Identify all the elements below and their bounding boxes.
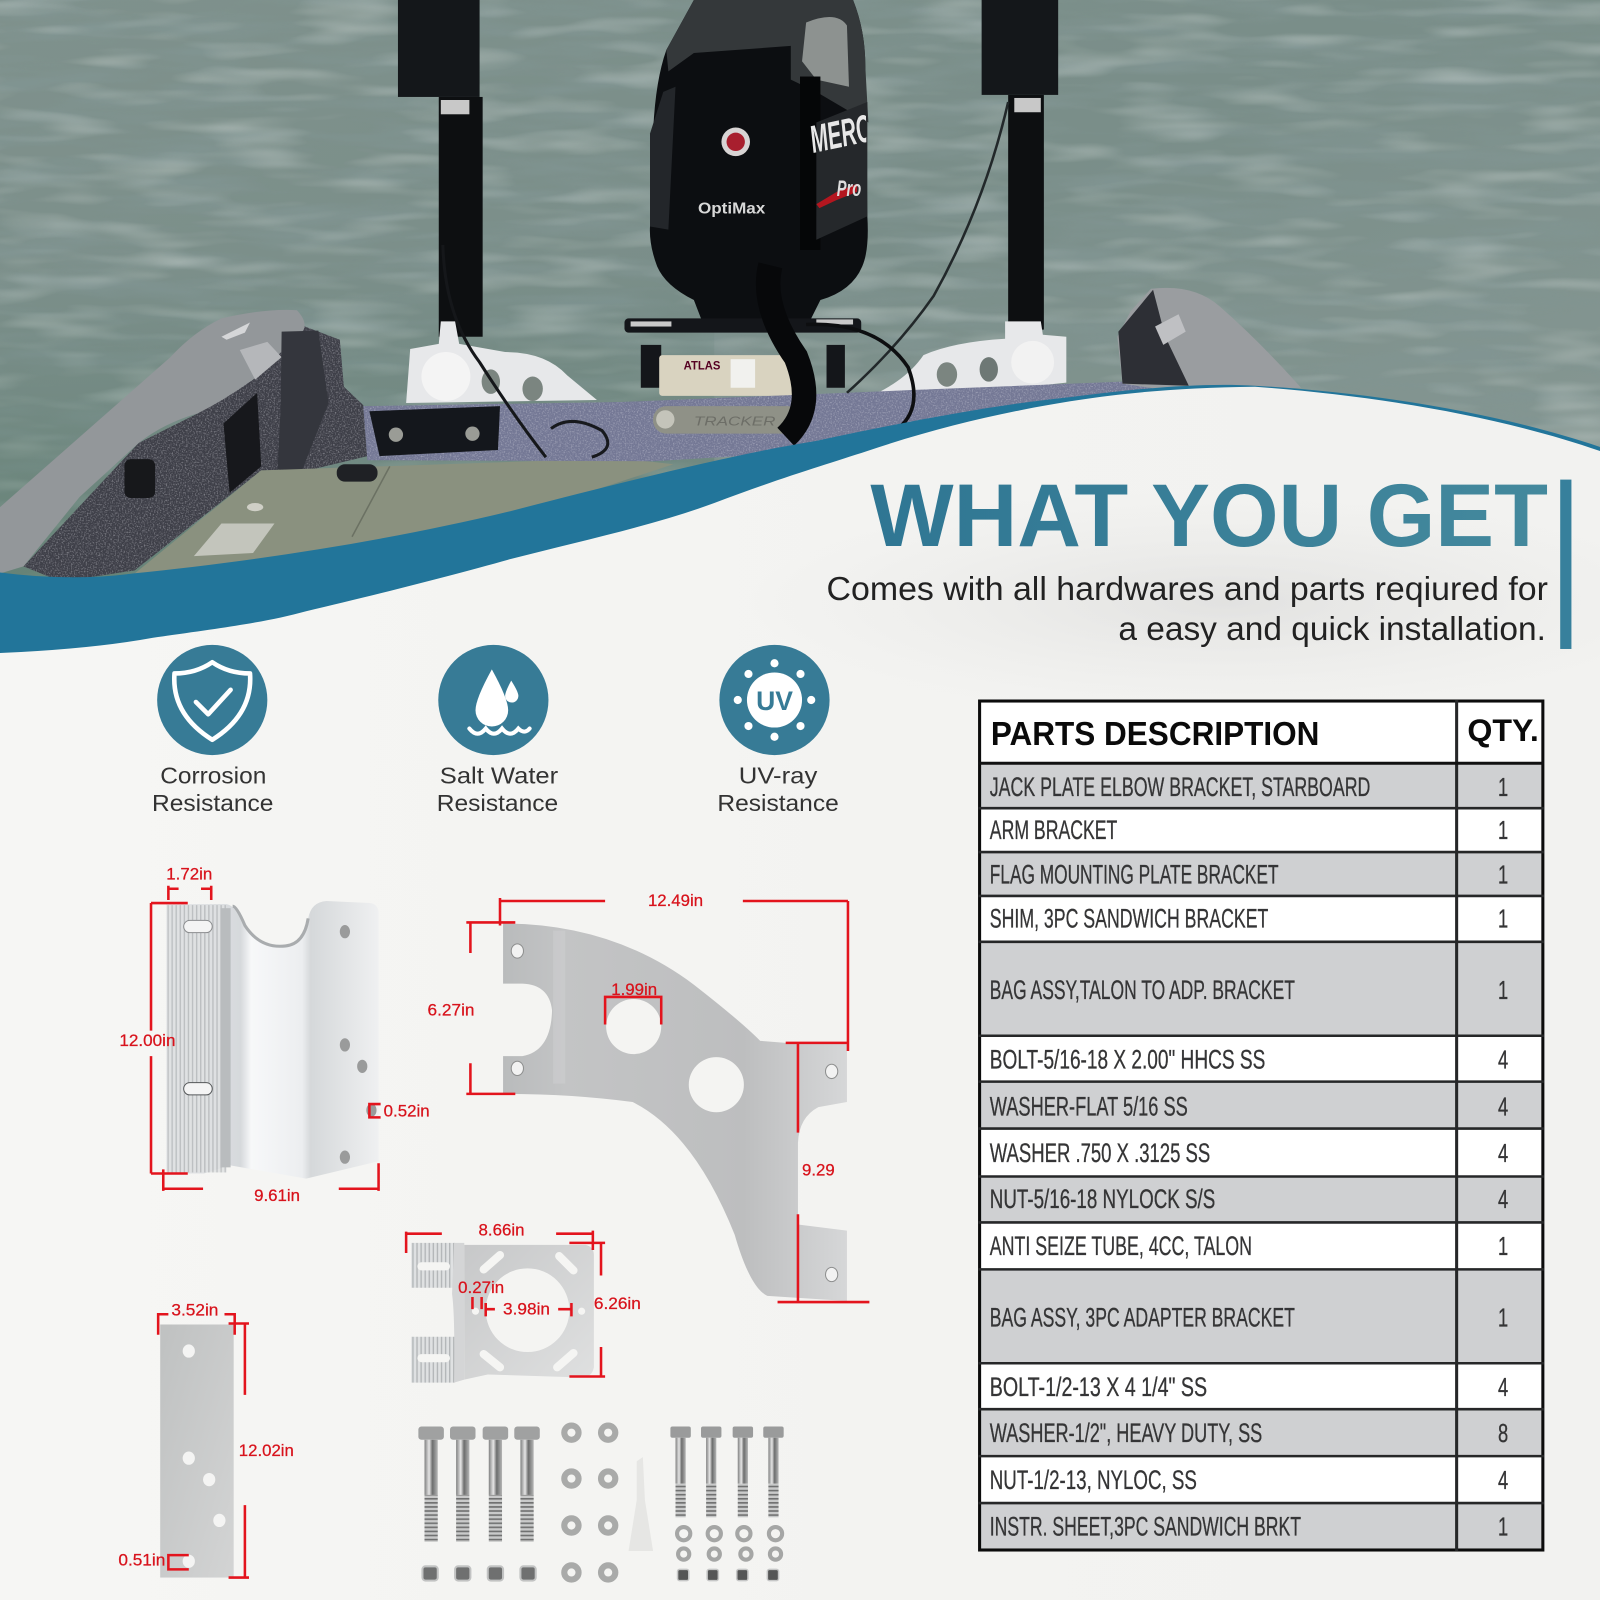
part names: FLAG MOUNTING PLATE BRACKET xyxy=(990,860,1279,890)
label: Resistance xyxy=(437,790,558,816)
quantities: 4 xyxy=(1498,1046,1508,1074)
subheading xyxy=(827,571,1548,648)
quantities: 1 xyxy=(1498,1233,1508,1261)
left gunwale of boat xyxy=(0,310,367,582)
water surface xyxy=(0,0,1600,673)
part names: BAG ASSY, 3PC ADAPTER BRACKET xyxy=(990,1303,1295,1333)
dimensions: 9.29 xyxy=(802,1162,835,1180)
brand lettering xyxy=(810,115,866,208)
dimensions: 12.00in xyxy=(119,1032,176,1050)
small washers xyxy=(677,1527,782,1560)
icon: UV sun: UV xyxy=(756,686,793,716)
label: UV-ray xyxy=(739,763,818,789)
dimensions xyxy=(428,892,869,1302)
bracket diagram: flag mounting plate xyxy=(406,1222,641,1383)
bracket diagram: elbow bracket xyxy=(119,866,430,1205)
dimensions: 3.98in xyxy=(503,1300,550,1318)
trolling motor pole right xyxy=(982,0,1058,330)
large nuts xyxy=(422,1566,536,1581)
anti-seize tube xyxy=(629,1457,653,1551)
deck xyxy=(135,458,673,573)
label: Resistance xyxy=(152,790,273,816)
dimensions: 0.27in xyxy=(458,1279,504,1297)
heading: WHAT YOU GET xyxy=(870,466,1548,565)
icon: water drops xyxy=(438,645,548,755)
part names: SHIM, 3PC SANDWICH BRACKET xyxy=(990,904,1268,934)
photo: boat stern on water xyxy=(0,0,1600,578)
part names: WASHER-FLAT 5/16 SS xyxy=(990,1091,1188,1121)
quantities: 4 xyxy=(1498,1467,1508,1495)
feature: UV-ray resistance xyxy=(717,645,839,816)
parts table xyxy=(979,700,1544,1551)
subheading: a easy and quick installation. xyxy=(1118,611,1546,648)
part names xyxy=(990,772,1370,1542)
jack plate: ATLAS xyxy=(684,358,720,372)
icon: UV sun xyxy=(719,645,830,755)
table grid xyxy=(979,700,1544,1551)
dimensions: 1.72in xyxy=(166,866,212,884)
brand lettering: Pro xyxy=(837,176,861,201)
quantities: 1 xyxy=(1498,862,1508,890)
dimensions: 0.51in xyxy=(118,1551,165,1569)
table header: QTY. xyxy=(1467,712,1539,748)
right gunwale xyxy=(1117,288,1301,393)
part names: JACK PLATE ELBOW BRACKET, STARBOARD xyxy=(990,772,1370,802)
dimensions: 9.61in xyxy=(254,1187,300,1205)
dimensions: 1.99in xyxy=(611,981,657,999)
quantities: 4 xyxy=(1498,1093,1508,1121)
trolling motor pole left xyxy=(398,0,483,337)
part names: NUT-5/16-18 NYLOCK S/S xyxy=(990,1184,1215,1214)
quantities: 1 xyxy=(1498,977,1508,1005)
jack plate xyxy=(624,318,861,396)
accent bar xyxy=(1560,480,1571,649)
part names: BOLT-1/2-13 X 4 1/4" SS xyxy=(990,1372,1207,1402)
small nuts xyxy=(678,1569,779,1581)
dimensions: 12.02in xyxy=(239,1442,294,1460)
icon: shield xyxy=(157,645,267,755)
dimensions xyxy=(406,1222,641,1377)
transom deck bar xyxy=(337,382,1194,482)
part names: NUT-1/2-13, NYLOC, SS xyxy=(990,1465,1197,1495)
outboard motor xyxy=(650,0,876,327)
label: Resistance xyxy=(717,790,839,816)
dimensions: 6.26in xyxy=(594,1295,641,1313)
label: Salt Water xyxy=(440,763,558,789)
quantities: 1 xyxy=(1498,774,1508,802)
wave: teal ribbon and page curve xyxy=(0,385,1600,1600)
brand lettering: MERC xyxy=(806,107,876,162)
white bracket right xyxy=(878,321,1066,393)
large bolts xyxy=(418,1427,540,1542)
bracket diagram: arm bracket xyxy=(428,892,869,1302)
title block xyxy=(827,466,1571,649)
part names: ARM BRACKET xyxy=(990,815,1117,845)
small bolts xyxy=(670,1427,784,1517)
bracket body xyxy=(166,901,379,1179)
quantities: 4 xyxy=(1498,1186,1508,1214)
part names: INSTR. SHEET,3PC SANDWICH BRKT xyxy=(990,1512,1301,1542)
quantities: 1 xyxy=(1498,906,1508,934)
feature: corrosion resistance xyxy=(152,645,273,816)
dimensions: 6.27in xyxy=(428,1001,474,1019)
plate body xyxy=(160,1324,234,1578)
hardware kit xyxy=(418,1426,784,1581)
subheading: Comes with all hardwares and parts reqiured for xyxy=(827,571,1548,608)
feature: salt water resistance xyxy=(437,645,558,816)
dimensions: 0.52in xyxy=(384,1102,430,1120)
transom deck bar: TRACKER xyxy=(694,414,776,429)
control cables xyxy=(443,102,1008,457)
bracket diagram: shim plate xyxy=(118,1301,294,1578)
part names: WASHER .750 X .3125 SS xyxy=(990,1138,1210,1168)
quantities: 1 xyxy=(1498,1305,1508,1333)
part names: WASHER-1/2", HEAVY DUTY, SS xyxy=(990,1418,1262,1448)
dimensions: 12.49in xyxy=(648,892,703,910)
bracket body xyxy=(503,923,847,1301)
quantities: 1 xyxy=(1498,1514,1508,1542)
quantities xyxy=(1498,774,1508,1542)
quantities: 1 xyxy=(1498,817,1508,845)
label: Corrosion xyxy=(160,763,266,789)
part names: ANTI SEIZE TUBE, 4CC, TALON xyxy=(990,1231,1252,1261)
table header xyxy=(991,712,1539,753)
part names: BAG ASSY,TALON TO ADP. BRACKET xyxy=(990,975,1295,1005)
dimensions xyxy=(119,866,430,1205)
table rows background xyxy=(979,700,1544,1551)
table header: PARTS DESCRIPTION xyxy=(991,716,1319,753)
flat washers xyxy=(564,1426,615,1580)
quantities: 4 xyxy=(1498,1140,1508,1168)
plate body xyxy=(411,1243,594,1383)
outboard motor: OptiMax xyxy=(698,200,766,217)
quantities: 4 xyxy=(1498,1374,1508,1402)
part names: BOLT-5/16-18 X 2.00" HHCS SS xyxy=(990,1044,1265,1074)
dimensions: 8.66in xyxy=(479,1222,524,1240)
dimensions xyxy=(118,1301,294,1578)
white bracket left xyxy=(406,321,597,403)
dimensions: 3.52in xyxy=(171,1301,218,1319)
quantities: 8 xyxy=(1498,1420,1508,1448)
